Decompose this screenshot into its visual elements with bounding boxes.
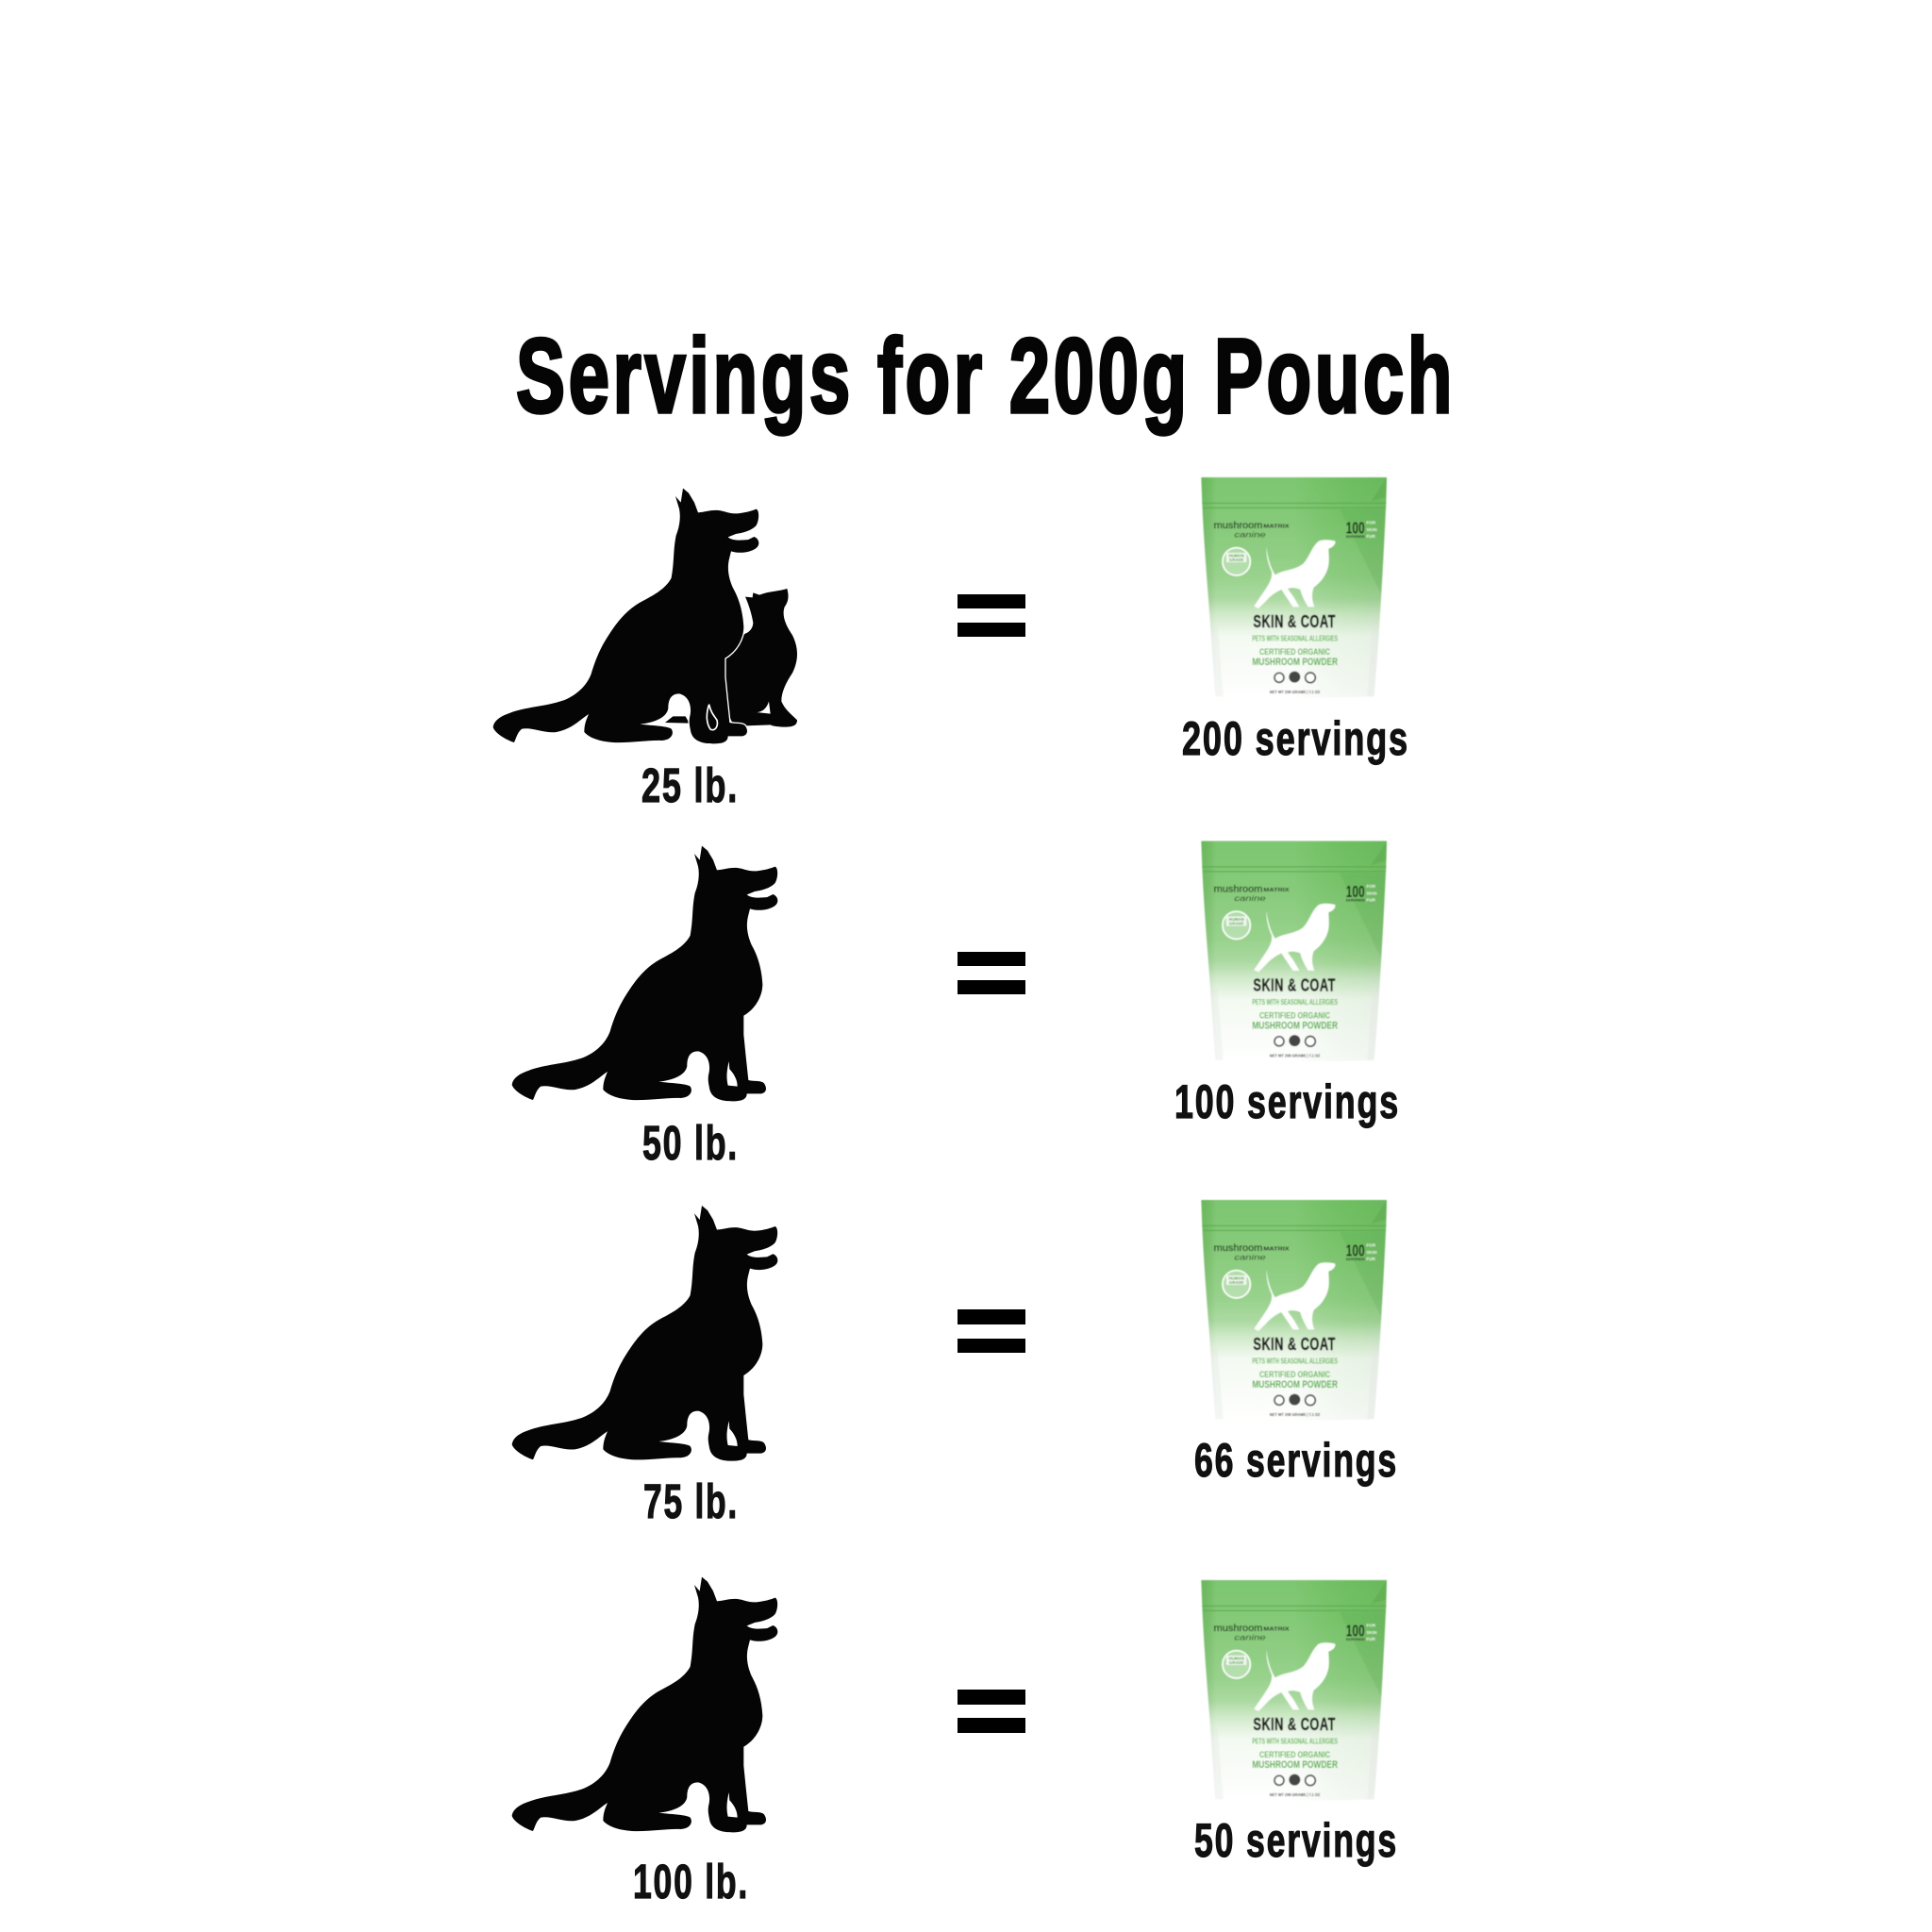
pouch: skin and coat: mushroom <box>1214 521 1262 531</box>
pouch: skin and coat: GRADE <box>1229 1280 1244 1285</box>
pouch: skin and coat: SERVINGS <box>1346 1638 1365 1641</box>
pouch: skin and coat: CERTIFIED ORGANIC <box>1259 1750 1330 1759</box>
pouch: skin and coat: SKIN & COAT <box>1253 1334 1336 1354</box>
row 4: 100 lb <box>512 1577 1398 1908</box>
pouch: skin and coat: MUSHROOM POWDER <box>1252 657 1338 668</box>
pouch: skin and coat: FOR <box>1366 520 1376 525</box>
pouch: skin and coat: MUSHROOM POWDER <box>1252 1759 1338 1771</box>
pouch: skin and coat: MATRIX <box>1263 888 1290 893</box>
pouch: skin and coat: HUMAN <box>1229 553 1244 558</box>
pouch: skin and coat: FOR <box>1366 884 1376 889</box>
equals sign <box>958 594 1025 637</box>
icon: dog silhouette with outline <box>493 489 758 743</box>
pouch: skin and coat: SKIN <box>1366 1250 1377 1255</box>
pouch: skin and coat: SKIN & COAT <box>1253 974 1336 994</box>
icon: cat silhouette <box>724 589 797 727</box>
pouch: skin and coat: 100 <box>1346 518 1365 537</box>
icon: dog silhouette <box>512 1206 777 1461</box>
icon: dog silhouette <box>512 1577 777 1832</box>
pouch: skin and coat <box>1201 1200 1387 1421</box>
title: Servings for 200g Pouch <box>516 317 1456 435</box>
pouch: skin and coat: SKIN <box>1366 891 1377 895</box>
pouch: skin and coat: CERTIFIED ORGANIC <box>1259 647 1330 657</box>
label: 25 lb: 25 lb. <box>641 758 739 812</box>
pouch: skin and coat: GRADE <box>1229 1660 1244 1665</box>
pouch: skin and coat: mushroom <box>1214 884 1262 894</box>
label: 75 lb: 75 lb. <box>643 1474 739 1528</box>
pouch: skin and coat: FOR <box>1366 1242 1376 1247</box>
pouch: skin and coat: SERVINGS <box>1346 1257 1365 1261</box>
pouch: skin and coat: GRADE <box>1229 558 1244 562</box>
pouch: skin and coat: MUSHROOM POWDER <box>1252 1020 1338 1031</box>
pouch: skin and coat: SKIN & COAT <box>1253 611 1336 631</box>
pouch: skin and coat: SKIN <box>1366 527 1377 532</box>
pouch: skin and coat: canine <box>1234 1253 1266 1261</box>
icon: white leg detail on dog <box>707 705 717 730</box>
equals sign <box>958 1309 1025 1353</box>
pouch: skin and coat: SKIN & COAT <box>1253 1714 1336 1734</box>
icon: small foot behind dog <box>665 716 690 724</box>
pouch: skin and coat: SERVINGS <box>1346 898 1365 902</box>
equals sign <box>958 1690 1025 1733</box>
pouch: skin and coat: 100 <box>1346 1621 1365 1640</box>
label: 100 lb: 100 lb. <box>633 1855 749 1908</box>
pouch: skin and coat: FUR <box>1366 1257 1376 1261</box>
pouch: skin and coat <box>1201 477 1387 698</box>
pouch: skin and coat: CERTIFIED ORGANIC <box>1259 1010 1330 1020</box>
pouch: skin and coat: HUMAN <box>1229 1275 1244 1280</box>
pouch: skin and coat: PETS WITH SEASONAL ALLERGIES <box>1252 1737 1338 1745</box>
pouch: skin and coat: MATRIX <box>1263 524 1290 529</box>
row 3: 75 lb <box>512 1200 1398 1528</box>
pouch: skin and coat: 100 <box>1346 1241 1365 1259</box>
pouch: skin and coat: mushroom <box>1214 1624 1262 1634</box>
label: 50 lb: 50 lb. <box>642 1116 739 1170</box>
pouch: skin and coat: canine <box>1234 894 1266 903</box>
pouch: skin and coat: PETS WITH SEASONAL ALLERGIES <box>1252 1357 1338 1365</box>
label: 100 servings: 100 servings <box>1174 1075 1400 1128</box>
pouch: skin and coat: HUMAN <box>1229 1656 1244 1660</box>
pouch: skin and coat: FOR <box>1366 1623 1376 1627</box>
pouch: skin and coat: 100 <box>1346 882 1365 901</box>
pouch: skin and coat: NET WT 200 GRAMS | 7.1 OZ <box>1270 1412 1321 1417</box>
label: 66 servings: 66 servings <box>1194 1434 1398 1487</box>
pouch: skin and coat: GRADE <box>1229 921 1244 925</box>
pouch: skin and coat: FUR <box>1366 534 1376 539</box>
icon: dog silhouette <box>512 846 777 1101</box>
pouch: skin and coat <box>1201 1580 1387 1801</box>
pouch: skin and coat: MATRIX <box>1263 1246 1290 1252</box>
pouch: skin and coat: MUSHROOM POWDER <box>1252 1379 1338 1391</box>
pouch: skin and coat: mushroom <box>1214 1243 1262 1254</box>
pouch: skin and coat: NET WT 200 GRAMS | 7.1 OZ <box>1270 1053 1321 1058</box>
pouch: skin and coat: NET WT 200 GRAMS | 7.1 OZ <box>1270 690 1321 694</box>
pouch: skin and coat: FUR <box>1366 897 1376 902</box>
pouch: skin and coat: PETS WITH SEASONAL ALLERGIES <box>1252 634 1338 642</box>
pouch: skin and coat: MATRIX <box>1263 1626 1290 1632</box>
pouch: skin and coat: HUMAN <box>1229 917 1244 922</box>
pouch: skin and coat: SERVINGS <box>1346 535 1365 539</box>
pouch: skin and coat: SKIN <box>1366 1630 1377 1635</box>
pouch: skin and coat: PETS WITH SEASONAL ALLERGIES <box>1252 998 1338 1007</box>
equals sign <box>958 952 1025 994</box>
row 2: 50 lb <box>512 841 1400 1170</box>
pouch: skin and coat: canine <box>1234 1633 1266 1641</box>
pouch: skin and coat: FUR <box>1366 1637 1376 1641</box>
row 1: 25 lb <box>493 477 1409 812</box>
label: 50 servings: 50 servings <box>1194 1814 1398 1867</box>
pouch: skin and coat: canine <box>1234 530 1266 539</box>
pouch: skin and coat <box>1201 841 1387 1061</box>
pouch: skin and coat: NET WT 200 GRAMS | 7.1 OZ <box>1270 1792 1321 1797</box>
pouch: skin and coat: CERTIFIED ORGANIC <box>1259 1370 1330 1379</box>
label: 200 servings: 200 servings <box>1182 712 1409 765</box>
